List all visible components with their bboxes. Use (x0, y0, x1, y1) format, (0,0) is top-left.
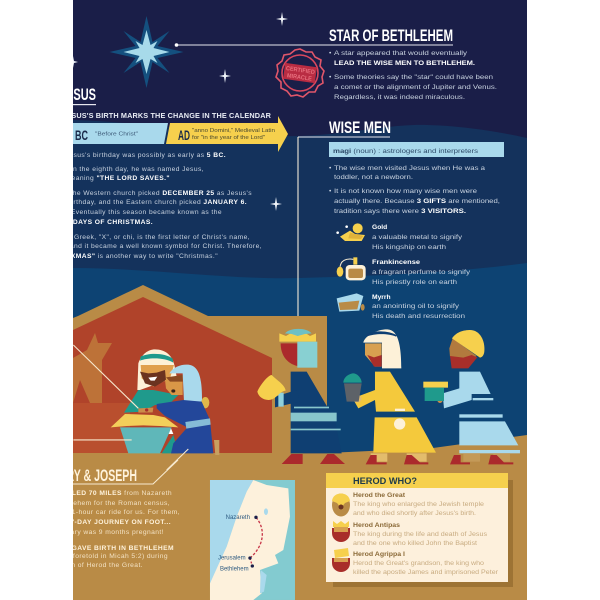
Herod the Great (332, 492, 484, 517)
map: Nazareth to Bethlehem: Jerusalem (218, 555, 246, 561)
panel heading: HEROD WHO? (353, 476, 417, 486)
icon: gold (336, 223, 365, 241)
icon: Herod Agrippa (332, 548, 350, 572)
AD arrow banner (166, 116, 288, 152)
BC banner (73, 123, 168, 144)
text block: Jesus facts: "XMAS" is another way to write "Christmas." (67, 253, 218, 260)
Herod Antipas: Herod Antipas (353, 522, 400, 529)
icon: star of Bethlehem (110, 16, 184, 88)
nativity: Joseph, Mary, manger (111, 349, 219, 455)
gift: frankincense: His priestly role on earth (372, 279, 457, 286)
text block: Mary and Joseph journey: a 1-hour car ride for us. For them, (65, 509, 180, 516)
text block: Mary and Joseph journey: A 7-DAY JOURNEY ON FOOT... (63, 519, 171, 526)
stable (73, 285, 327, 453)
icon: certified miracle seal: MIRACLE (287, 73, 312, 83)
text block: star facts: a comet or the alignment of Jupiter and Venus. (334, 84, 497, 91)
text block: wise men facts: tradition says there were 3 VISITORS. (334, 208, 466, 215)
heading: Jesus (73, 88, 96, 106)
text block: wise men facts: It is not known how many wise men were (334, 188, 477, 195)
text block: Mary and Joseph journey: and Mary was 9 months pregnant! (50, 529, 164, 536)
gift: myrrh: an anointing oil to signify (372, 303, 460, 310)
text block: Jesus facts: birthday, and the Eastern church picked JANUARY 6. (67, 199, 247, 206)
text block: Jesus facts: On the eighth day, he was named Jesus, (67, 166, 204, 173)
icon: Herod the Great (332, 494, 350, 516)
text block: star facts: • (329, 74, 332, 81)
text block: Mary and Joseph journey (73, 490, 179, 567)
text block: wise men facts: • (329, 188, 332, 195)
text block: star facts: • (329, 50, 332, 57)
heading: Wise Men: WISE MEN (329, 118, 391, 137)
text block: Jesus facts: and it became a well known symbol for Christ. Therefore, (70, 243, 262, 250)
heading: calendar change: JESUS'S BIRTH MARKS THE CHANGE IN THE CALENDAR (62, 111, 272, 120)
Herod Antipas: The king during the life and death of Jesus (353, 531, 488, 538)
text block: wise men facts: toddler, not a newborn. (334, 174, 413, 181)
AD arrow banner: AD (178, 127, 190, 143)
text block: Jesus facts: In Greek, "X", or chi, is the first letter of Christ's name, (65, 234, 250, 241)
wise man 3 (423, 330, 520, 464)
heading: Jesus: JESUS (60, 85, 96, 104)
text block: wise men facts (329, 165, 500, 215)
BC banner: "Before Christ" (95, 132, 138, 138)
wise man 2 (343, 329, 436, 464)
icon: certified miracle seal: CERTIFIED (286, 66, 316, 76)
text block: Mary and Joseph journey: (as foretold in Micah 5:2) during (60, 553, 168, 560)
gift: gold (336, 223, 463, 251)
panel: Herod who (326, 473, 513, 587)
Herod Agrippa I: killed the apostle James and imprisoned Peter (353, 569, 499, 576)
callout lines (73, 345, 188, 470)
text block: Mary and Joseph journey: the reign of Herod the Great. (46, 562, 143, 569)
AD arrow banner: for "in the year of the Lord" (192, 135, 265, 141)
text block: Jesus facts: Jesus's birthday was possibly as early as 5 BC. (66, 152, 226, 159)
gift: myrrh: His death and resurrection (372, 313, 465, 320)
text block: star facts: LEAD THE WISE MEN TO BETHLEHEM. (334, 60, 475, 67)
Herod the Great: Herod the Great (353, 492, 406, 499)
text block: Jesus facts: 12 DAYS OF CHRISTMAS. (62, 219, 153, 226)
text block: wise men facts: actually there. Because 3 GIFTS are mentioned, (334, 198, 500, 205)
text block: Mary and Joseph journey: MARY GAVE BIRTH IN BETHLEHEM (48, 545, 174, 552)
map: Nazareth to Bethlehem: Nazareth (226, 515, 250, 521)
gift: frankincense: a fragrant perfume to signify (372, 269, 471, 276)
text block: star facts (329, 50, 497, 101)
background: night sky (73, 0, 527, 138)
text block: Mary and Joseph journey: TRAVELED 70 MILES from Nazareth (48, 490, 172, 497)
Mary (157, 365, 219, 455)
AD arrow banner: "anno Domini," Medieval Latin (192, 128, 275, 134)
wise man 1 (257, 329, 345, 464)
BC banner: BC (75, 127, 88, 143)
heading: Mary and Joseph (73, 460, 178, 484)
text block: Jesus facts (62, 152, 262, 260)
gift: myrrh (337, 293, 465, 320)
wise men group (257, 329, 520, 464)
Herod Agrippa I: Herod Agrippa I (353, 551, 405, 558)
small stars (68, 12, 288, 211)
manger (111, 408, 178, 453)
icon: myrrh (337, 293, 365, 312)
Herod Antipas (332, 521, 488, 547)
text block: Mary and Joseph journey: to Bethlehem for the Roman census, (47, 500, 170, 507)
definition box: magi: magi (noun) : astrologers and interpreters (333, 148, 479, 155)
gift: gold: a valuable metal to signify (372, 234, 463, 241)
gift: myrrh: Myrrh (372, 294, 391, 301)
Herod the Great: The king who enlarged the Jewish temple (353, 501, 484, 508)
Herod Agrippa I (332, 548, 499, 576)
background: mid sky band (73, 120, 527, 278)
gift: gold: Gold (372, 224, 387, 231)
heading: Mary and Joseph: MARY & JOSEPH (50, 466, 137, 485)
text block: star facts: Some theories say the "star" could have been (334, 74, 493, 81)
text block: wise men facts: The wise men visited Jesus when He was a (334, 165, 485, 172)
connector lines (177, 45, 453, 325)
gift: frankincense: Frankincense (372, 259, 420, 266)
Joseph (124, 349, 178, 453)
definition box: magi (329, 142, 504, 157)
ground (73, 435, 527, 600)
text block: Jesus facts: Eventually this season became known as the (71, 209, 222, 216)
Herod the Great: and who died shortly after Jesus's birth. (353, 510, 476, 517)
donkey silhouette (73, 333, 112, 403)
text block: wise men facts: • (329, 165, 332, 172)
Herod Antipas: and the one who killed John the Baptist (353, 540, 477, 547)
icon: frankincense (337, 257, 366, 280)
map: Nazareth to Bethlehem (210, 480, 295, 600)
Herod Agrippa I: Herod the Great's grandson, the king who (353, 560, 484, 567)
text block: Jesus facts: meaning "THE LORD SAVES." (66, 175, 170, 182)
gift: frankincense (337, 257, 471, 286)
map: Nazareth to Bethlehem: Bethlehem (220, 567, 249, 573)
background: lower sky band (73, 263, 527, 452)
icon: certified miracle seal (276, 49, 324, 97)
text block: Jesus facts: The Western church picked DECEMBER 25 as Jesus's (68, 190, 252, 197)
text block: star facts: A star appeared that would eventually (334, 50, 468, 57)
heading: Star of Bethlehem: STAR OF BETHLEHEM (329, 26, 453, 45)
icon: Herod Antipas (332, 521, 350, 542)
text block: star facts: Regardless, it was indeed miraculous. (334, 94, 465, 101)
gift: gold: His kingship on earth (372, 244, 446, 251)
